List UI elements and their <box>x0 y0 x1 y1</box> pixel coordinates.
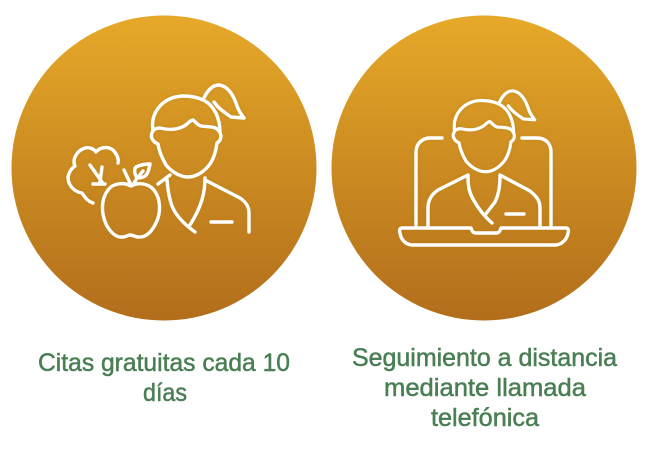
panel: free appointments <box>12 16 316 407</box>
caption right: Seguimiento a distancia <box>352 344 617 372</box>
caption right: telefónica <box>431 404 539 432</box>
caption right: mediante llamada <box>384 374 586 402</box>
gold circle right <box>332 16 636 320</box>
icon: woman on laptop <box>400 91 568 245</box>
panel: remote follow-up <box>332 16 636 432</box>
caption right <box>352 344 617 432</box>
caption left: Citas gratuitas cada 10 <box>38 349 290 377</box>
gold circle left <box>12 16 316 320</box>
caption left <box>38 349 290 407</box>
caption left: días <box>143 379 187 407</box>
icon: woman with apple and broccoli <box>68 85 249 237</box>
